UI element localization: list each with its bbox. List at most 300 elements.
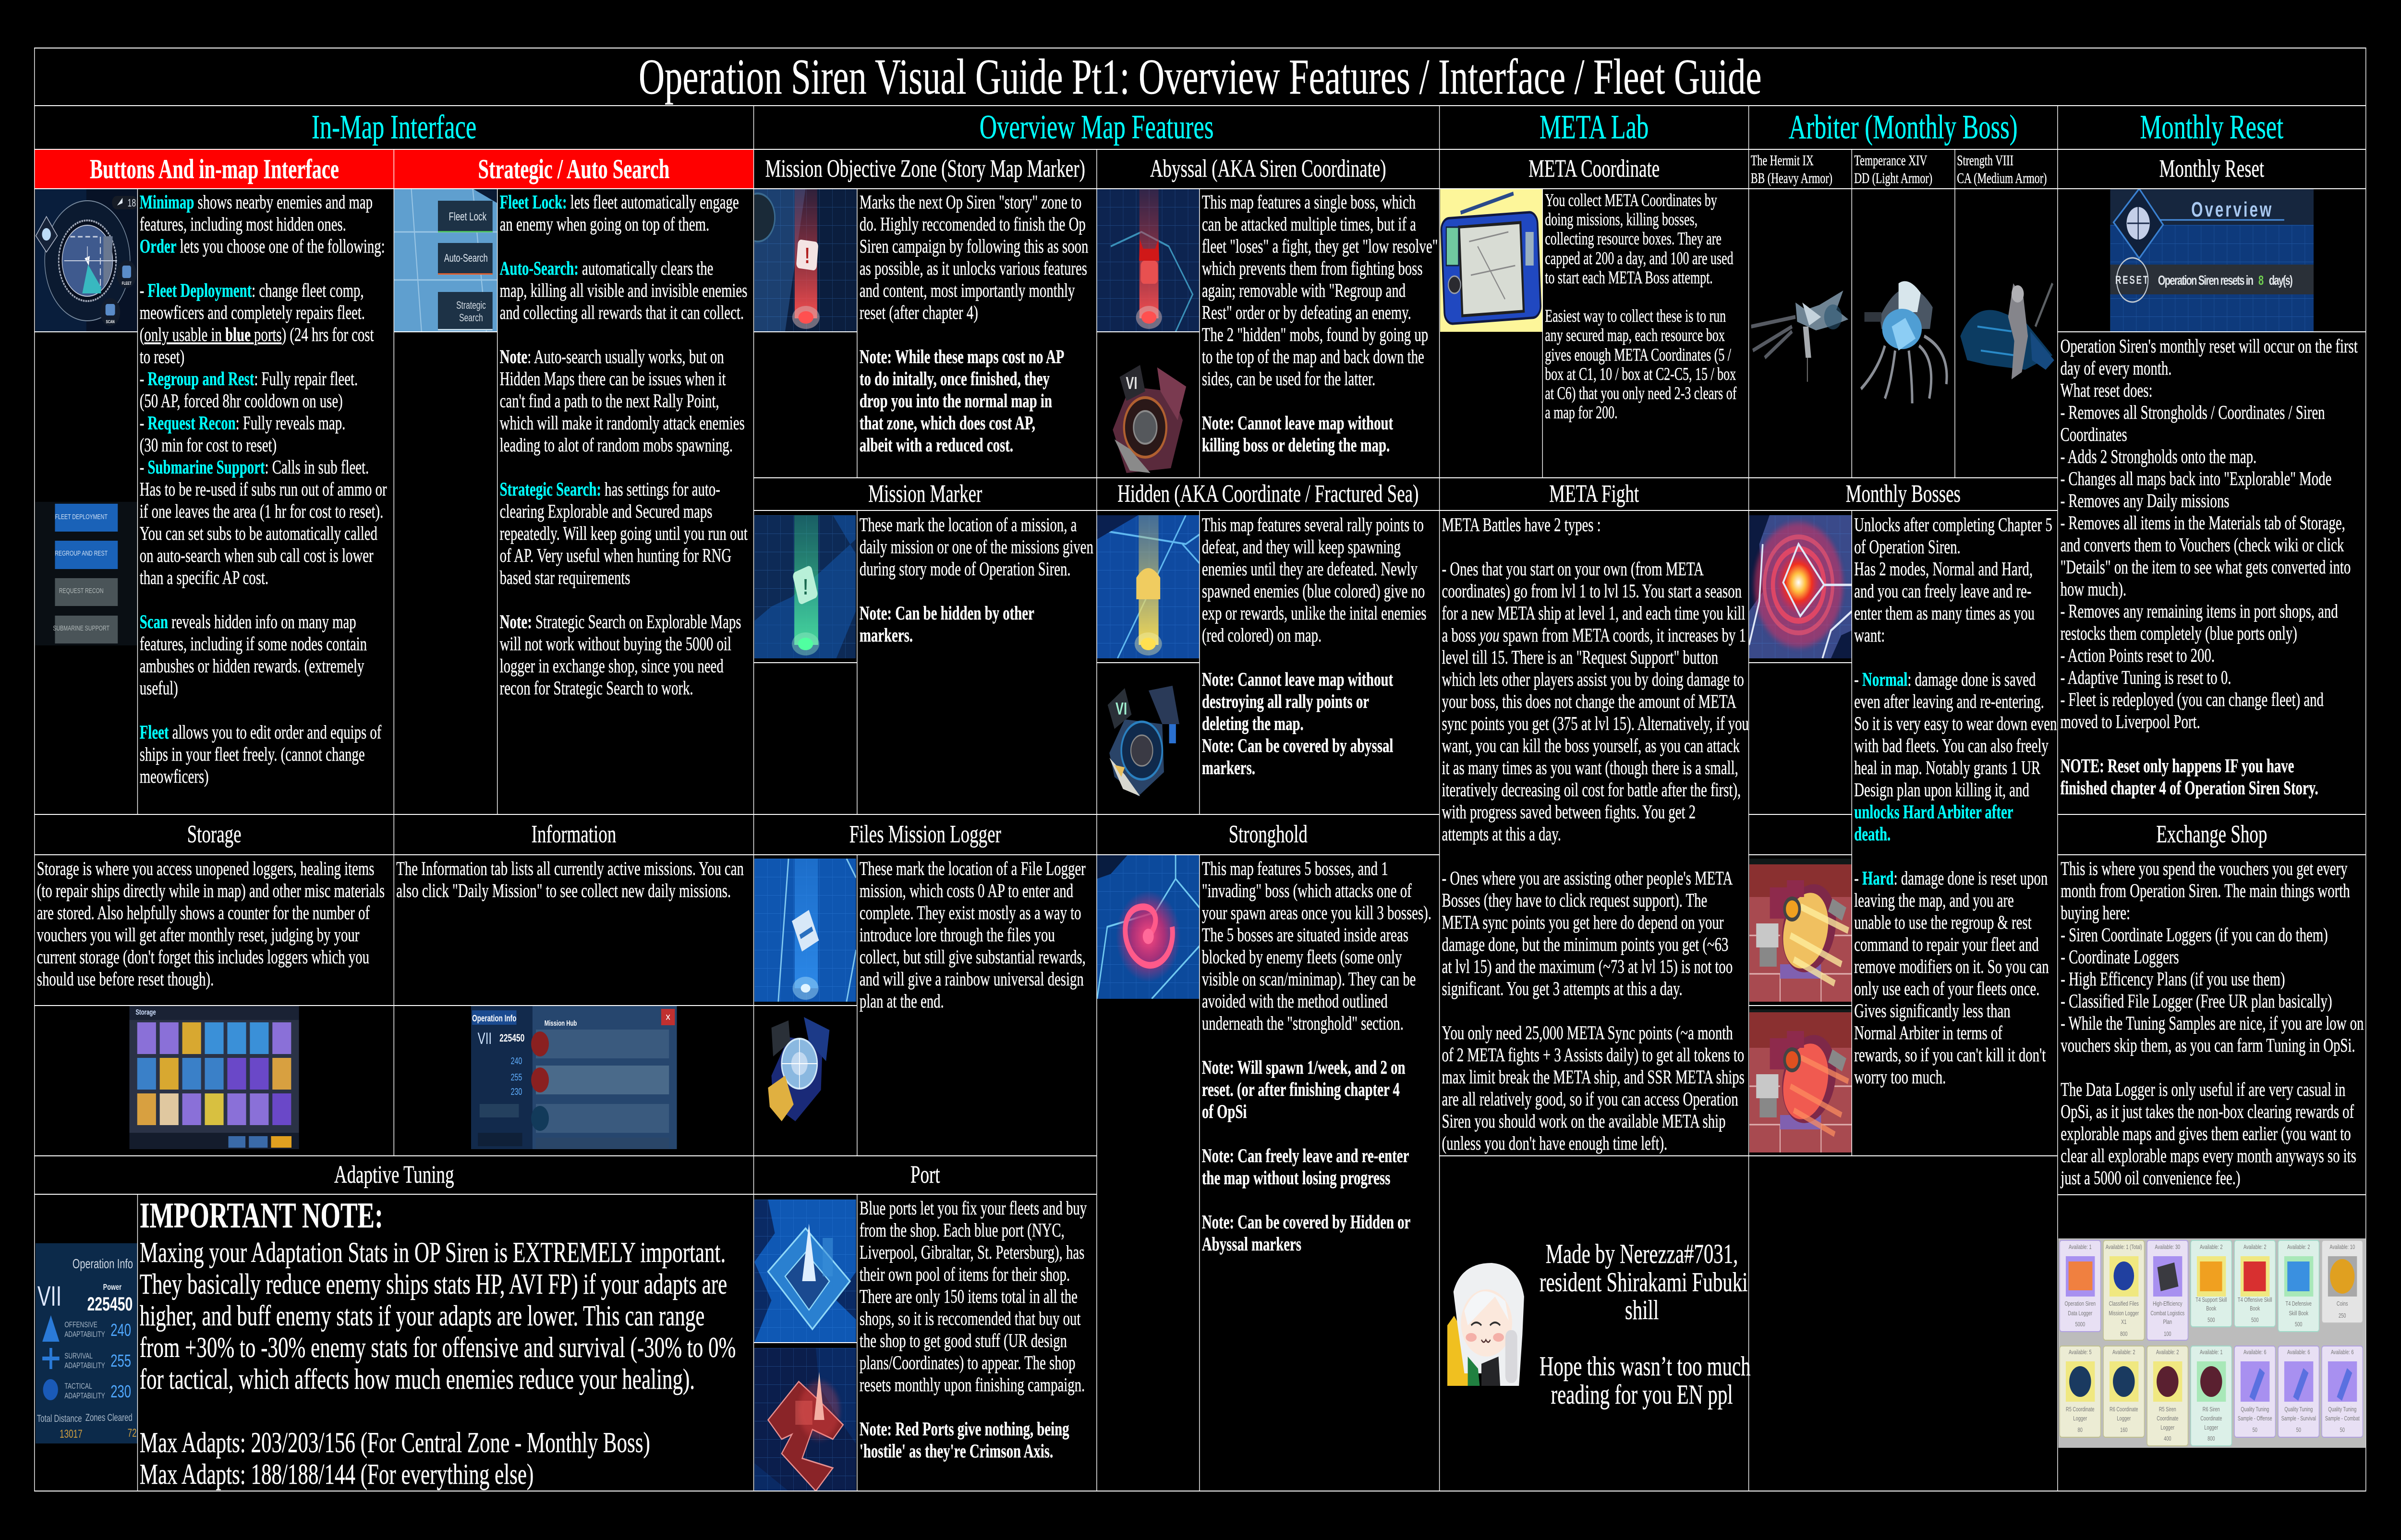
- text: Buttons and in-map interface: useful): [140, 677, 178, 699]
- image: exchange shop items: R5 Coordinate: [2066, 1407, 2095, 1413]
- image: exchange shop items: Available: 2: [2112, 1349, 2135, 1356]
- image: adaptive stats panel: VII: [37, 1280, 61, 1312]
- text: Monthly Reset: - Fleet is redeployed (you can change fleet) and: [2061, 689, 2324, 710]
- image: adaptive stats panel: 225450: [87, 1294, 133, 1315]
- text: Buttons and in-map interface: Order lets you choose one of the following:: [140, 235, 385, 257]
- text: Mission Marker: [860, 514, 1093, 646]
- section heading: Overview Map Features: Overview Map Features: [980, 109, 1213, 146]
- image: exchange shop items: Available: 6: [2243, 1349, 2267, 1356]
- text: META Fight: iteratively decreasing oil cost for battle after the first),: [1442, 779, 1741, 800]
- image: order buttons: REGROUP AND REST: [55, 549, 108, 557]
- text: Buttons and in-map interface: [140, 191, 387, 788]
- text: Buttons and in-map interface: on auto-search when sub call cost is lower: [140, 545, 374, 566]
- text: Abyssal: sides, can be used for the latter.: [1202, 368, 1375, 389]
- text: Monthly Reset: [2061, 335, 2358, 799]
- text: Strategic and auto search: Fleet Lock: lets fleet automatically engage: [500, 191, 739, 213]
- text: META Coordinate: any secured map, each resource box: [1545, 325, 1725, 345]
- text: Stronghold: This map features 5 bosses, and 1: [1202, 858, 1388, 879]
- text: META Fight: attempts at this a day.: [1442, 823, 1561, 845]
- heading: Information: Information: [532, 821, 616, 848]
- text: Mission Objective Zone: Siren campaign by following this as soon: [860, 235, 1088, 257]
- text: Strategic and auto search: of AP. Very useful when hunting for RNG: [500, 545, 731, 566]
- image: exchange shop items: Available: 2: [2243, 1244, 2267, 1250]
- image: exchange shop items: R6 Coordinate: [2110, 1407, 2138, 1413]
- icon: coordinate logger: [1104, 681, 1181, 799]
- text: Buttons and in-map interface: - Request Recon: Fully reveals map.: [140, 412, 345, 434]
- image: operation info screen: Mission Hub: [545, 1019, 577, 1027]
- text: META Fight: at lvl 15) and the maximum (~73 at lvl 15) is not too: [1442, 956, 1733, 977]
- text: Buttons and in-map interface: (only usable in blue ports) (24 hrs for cost: [140, 324, 374, 345]
- text: Monthly Bosses: heal in map. Notably grants 1 UR: [1854, 757, 2040, 778]
- text: Exchange Shop: clear all explorable maps every month anyways so its: [2061, 1145, 2356, 1166]
- image: overview reset banner: [2110, 189, 2314, 332]
- text: META Fight: sync points you get (375 at lvl 15). Alternatively, if you: [1442, 713, 1749, 734]
- image: exchange shop items: Coins: [2337, 1301, 2348, 1307]
- image: minimap: 18: [128, 198, 136, 209]
- note: Adaptive Tuning important note: They basically reduce enemy ships stats HP, AVI FP) if your adapts are: [140, 1268, 727, 1300]
- text: Abyssal: to the top of the map and back down the: [1202, 346, 1424, 367]
- image: exchange shop items: 100: [2164, 1331, 2171, 1337]
- text: META Coordinate: a map for 200.: [1545, 402, 1618, 422]
- text: Storage: should use before reset though).: [37, 968, 214, 990]
- section heading: Monthly Reset: Monthly Reset: [2140, 109, 2283, 146]
- text: META Coordinate: capped at 200 a day, and 100 are used: [1545, 248, 1734, 268]
- image: adaptive stats panel: [36, 1243, 137, 1443]
- image: exchange shop items: Logger: [2160, 1425, 2174, 1431]
- text: credit note: Made by Nerezza#7031,: [1546, 1239, 1738, 1269]
- image: order buttons: REQUEST RECON: [59, 586, 104, 594]
- heading: The Hermit IX: BB (Heavy Armor): [1751, 170, 1832, 186]
- heading: Hidden: Hidden (AKA Coordinate / Fractured Sea): [1117, 480, 1419, 508]
- image: adaptive stats panel: ADAPTABILITY: [64, 1330, 105, 1339]
- text: Exchange Shop: - While the Tuning Samples are nice, if you are low on: [2061, 1012, 2364, 1034]
- text: Exchange Shop: OpSi, as it just takes the non-box clearing rewards of: [2061, 1101, 2354, 1122]
- text: META Coordinate: You collect META Coordinates by: [1545, 190, 1717, 210]
- text: Stronghold: "invading" boss (which attacks one of: [1202, 880, 1412, 901]
- heading: Stronghold: Stronghold: [1229, 821, 1308, 848]
- image: adaptive stats panel: 230: [110, 1382, 131, 1401]
- text: Stronghold: the map without losing progress: [1202, 1167, 1390, 1188]
- image: exchange shop items: Classified Files: [2109, 1301, 2139, 1307]
- text: Exchange Shop: - Siren Coordinate Loggers (if you can do them): [2061, 924, 2328, 946]
- text: Exchange Shop: just a 5000 oil convenience fee.): [2061, 1167, 2240, 1188]
- text: credit note: reading for you EN ppl: [1551, 1379, 1733, 1410]
- heading: Monthly Reset: Monthly Reset: [2159, 155, 2264, 182]
- text: Abyssal: fleet "loses" a fight, they get "low resolve": [1202, 235, 1438, 257]
- image: order buttons: SUBMARINE SUPPORT: [53, 624, 109, 632]
- image: exchange shop items: Sample - Combat: [2325, 1416, 2360, 1422]
- text: Monthly Bosses: enter them as many times as you: [1854, 602, 2035, 624]
- text: Buttons and in-map interface: Fleet allows you to edit order and equips of: [140, 721, 381, 743]
- text: Exchange Shop: [2061, 858, 2364, 1189]
- text: Monthly Reset: "Details" on the item to see what gets converted into: [2061, 556, 2351, 578]
- image: stronghold swirl: [1097, 855, 1200, 999]
- image: exchange shop items: Quality Tuning: [2241, 1407, 2269, 1413]
- image: story map marker: [754, 189, 857, 332]
- text: Strategic and auto search: which will make it randomly attack enemies: [500, 412, 745, 434]
- image: adaptive stats panel: Power: [103, 1283, 121, 1292]
- text: Monthly Bosses: command to repair your fleet and: [1854, 934, 2039, 955]
- image: operation info screen: 225450: [499, 1033, 524, 1044]
- text: Port: their own pool of items for their shop.: [860, 1263, 1070, 1285]
- image: overview reset banner: Overview: [2191, 198, 2271, 221]
- text: Storage: Storage is where you access unopened loggers, healing items: [37, 858, 374, 879]
- image: exchange shop items: Available: 1: [2069, 1244, 2092, 1250]
- text: Hidden: destroying all rally points or: [1202, 691, 1369, 712]
- text: Port: from the shop. Each blue port (NYC,: [860, 1219, 1065, 1241]
- text: Stronghold: your spawn areas once you kill 3 bosses).: [1202, 902, 1431, 923]
- text: Port: Blue ports let you fix your fleets and buy: [860, 1197, 1087, 1219]
- text: Stronghold: Note: Can be covered by Hidden or: [1202, 1211, 1410, 1233]
- image: operation info screen: Operation Info: [472, 1014, 516, 1024]
- image: exchange shop items: Logger: [2204, 1425, 2218, 1431]
- text: Stronghold: The 5 bosses are situated inside areas: [1202, 924, 1408, 946]
- text: Buttons and in-map interface: - Fleet Deployment: change fleet comp,: [140, 279, 364, 301]
- text: META Fight: coordinates) go from lvl 1 to lvl 15. You start a season: [1442, 580, 1742, 602]
- text: Hidden: enemies until they are defeated. Newly: [1202, 558, 1418, 580]
- text: Buttons and in-map interface: (30 min for cost to reset): [140, 434, 277, 456]
- text: Monthly Reset: how much).: [2061, 578, 2126, 600]
- text: Hidden: markers.: [1202, 757, 1255, 778]
- image: exchange shop items: Available: 1 (Total): [2106, 1244, 2142, 1250]
- red heading: Strategic / Auto Search: [394, 150, 754, 189]
- text: Abyssal: again; removable with "Regroup and: [1202, 279, 1406, 301]
- text: Strategic and auto search: Auto-Search: automatically clears the: [500, 257, 713, 279]
- image: overview reset banner: RESET: [2115, 274, 2149, 287]
- text: Mission Objective Zone: albeit with a reduced cost.: [860, 434, 1013, 456]
- text: Strategic and auto search: map, killing all visible and invisible enemies: [500, 279, 747, 301]
- image: hidden map marker: [1097, 515, 1200, 658]
- text: Abyssal: which prevents them from fighting boss: [1202, 257, 1423, 279]
- text: Monthly Reset: - Changes all maps back into "Explorable" Mode: [2061, 468, 2331, 489]
- text: Stronghold: avoided with the method outlined: [1202, 990, 1388, 1012]
- text: META Fight: META sync points you get here do depend on your: [1442, 911, 1724, 933]
- image: adaptive stats panel: Operation Info: [73, 1257, 133, 1272]
- text: Abyssal: [1202, 191, 1438, 456]
- text: Monthly Bosses: - Hard: damage done is reset upon: [1854, 867, 2048, 889]
- text: Port: plans/Coordinates) to appear. The shop: [860, 1352, 1075, 1373]
- text: Mission Objective Zone: do. Highly reccomended to finish the Op: [860, 213, 1086, 235]
- image: Temperance boss: [1854, 264, 1954, 403]
- image: exchange shop items: 800: [2207, 1436, 2215, 1442]
- text: Exchange Shop: explorable maps and gives them earlier (you want to: [2061, 1123, 2351, 1144]
- text: Mission Objective Zone: Note: While these maps cost no AP: [860, 346, 1064, 367]
- image: operation info screen: ×: [666, 1010, 670, 1024]
- text: Strategic and auto search: Note: Auto-search usually works, but on: [500, 346, 724, 367]
- heading: Temperance XIV: [1854, 151, 1932, 187]
- note: Adaptive Tuning important note: higher, and buff enemy stats if your adapts are lower. This can range: [140, 1300, 704, 1332]
- text: Exchange Shop: The Data Logger is only useful if are very casual in: [2061, 1079, 2345, 1100]
- heading: Mission Objective Zone: Mission Objective Zone (Story Map Marker): [765, 155, 1085, 182]
- image: exchange shop items: 5000: [2075, 1322, 2085, 1328]
- image: exchange shop items: Mission Logger: [2109, 1310, 2139, 1317]
- title: Operation Siren Visual Guide Pt1: Overview Features / Interface / Fleet Guide: [639, 49, 1761, 105]
- text: Stronghold: Note: Will spawn 1/week, and 2 on: [1202, 1056, 1405, 1078]
- text: Storage: (to repair ships directly while in map) and other misc materials: [37, 880, 385, 901]
- text: Stronghold: underneath the "stronghold" section.: [1202, 1012, 1404, 1034]
- text: Monthly Bosses: want:: [1854, 624, 1885, 646]
- text: Abyssal: This map features a single boss, which: [1202, 191, 1416, 213]
- text: Buttons and in-map interface: meowficers): [140, 765, 209, 787]
- image: exchange shop items: Coordinate: [2200, 1416, 2222, 1422]
- text: Stronghold: Note: Can freely leave and re-enter: [1202, 1145, 1409, 1166]
- image: exchange shop items: R6 Siren: [2203, 1407, 2220, 1413]
- text: Port: There are only 150 items total in all the: [860, 1285, 1078, 1307]
- image: exchange shop items: Skill Book: [2289, 1310, 2308, 1317]
- image: adaptive stats panel: Total Distance: [37, 1413, 82, 1424]
- text: Monthly Bosses: worry too much.: [1854, 1066, 1946, 1088]
- text: META Fight: - Ones where you are assisting other people's META: [1442, 867, 1733, 889]
- text: credit note: resident Shirakami Fubuki: [1540, 1267, 1748, 1297]
- text: Monthly Bosses: Unlocks after completing Chapter 5: [1854, 514, 2052, 535]
- note: Adaptive Tuning important note: for tactical, which affects how much enemies reduce your healing).: [140, 1363, 695, 1395]
- text: Abyssal: killing boss or deleting the map.: [1202, 434, 1390, 456]
- image: minimap: [35, 189, 137, 332]
- text: Stronghold: blocked by enemy fleets (some only: [1202, 946, 1402, 968]
- text: Monthly Bosses: rewards, so if you can't kill it don't: [1854, 1044, 2046, 1066]
- text: Monthly Reset: - Removes any Daily missions: [2061, 490, 2229, 511]
- heading: Files Mission Logger: Files Mission Logger: [849, 821, 1001, 848]
- image: Normal arbiter ship: [1749, 859, 1852, 1002]
- text: Storage: vouchers you will get after monthly reset, judging by your: [37, 924, 359, 946]
- text: META Fight: are all relatively good, so if you can access Operation: [1442, 1088, 1738, 1110]
- image: exchange shop items: Quality Tuning: [2328, 1407, 2356, 1413]
- image: fleet lock and auto search buttons: Strategic: [456, 300, 486, 312]
- image: abyssal map marker: [1097, 189, 1200, 332]
- text: Stronghold: of OpSi: [1202, 1101, 1247, 1122]
- image: adaptive stats panel: 13017: [60, 1428, 83, 1441]
- image: exchange shop items: Logger: [2117, 1416, 2131, 1422]
- text: Exchange Shop: This is where you spend the vouchers you get every: [2061, 858, 2348, 879]
- image: Hard arbiter ship: [1749, 1009, 1852, 1152]
- heading: Monthly Bosses: Monthly Bosses: [1846, 480, 1961, 508]
- text: Exchange Shop: month from Operation Siren. The main things worth: [2061, 880, 2350, 901]
- text: META Fight: it as many times as you want (though there is a small,: [1442, 757, 1738, 778]
- text: credit note: Hope this wasn’t too much: [1540, 1351, 1751, 1382]
- note: Adaptive Tuning important note: Maxing your Adaptation Stats in OP Siren is EXTREMELY important.: [140, 1237, 726, 1269]
- text: Hidden: defeat, and they will keep spawning: [1202, 536, 1401, 558]
- text: Monthly Reset: - Adaptive Tuning is reset to 0.: [2061, 667, 2231, 688]
- text: Files Mission Logger: plan at the end.: [860, 990, 944, 1012]
- text: META Fight: your boss, this does not change the amount of META: [1442, 691, 1736, 712]
- heading: Strength VIII: [1957, 151, 2047, 187]
- text: Port: resets monthly upon finishing campaign.: [860, 1374, 1085, 1395]
- text: Monthly Bosses: unlocks Hard Arbiter after: [1854, 801, 2013, 823]
- image: order buttons: [35, 502, 137, 645]
- text: Monthly Bosses: death.: [1854, 823, 1891, 845]
- image: mission marker: !: [803, 575, 808, 599]
- text: Strategic and auto search: [500, 191, 748, 699]
- text: Strategic and auto search: clearing Explorable and Secured maps: [500, 500, 713, 522]
- text: Buttons and in-map interface: features, including most hidden ones.: [140, 213, 346, 235]
- text: credit note: [1540, 1240, 1744, 1409]
- text: META Fight: [1442, 514, 1749, 1154]
- red heading: Strategic / Auto Search: Strategic / Auto Search: [478, 154, 669, 184]
- text: Monthly Bosses: of Operation Siren.: [1854, 536, 1961, 558]
- section heading: Arbiter (Monthly Boss): Arbiter (Monthly Boss): [1789, 109, 2018, 146]
- text: Buttons and in-map interface: Scan reveals hidden info on many map: [140, 611, 356, 632]
- image: overview reset banner: 8: [2258, 273, 2264, 288]
- text: META Fight: Siren you should work on the available META ship: [1442, 1110, 1726, 1132]
- text: Monthly Reset: finished chapter 4 of Operation Siren Story.: [2061, 777, 2318, 799]
- note: Adaptive Tuning important note: IMPORTANT NOTE:: [140, 1196, 383, 1236]
- image: exchange shop items: 800: [2120, 1331, 2128, 1337]
- text: Monthly Reset: NOTE: Reset only happens IF you have: [2061, 755, 2294, 776]
- image: exchange shop items: 50: [2296, 1427, 2301, 1433]
- image: exchange shop items: Book: [2250, 1306, 2260, 1312]
- text: Hidden: Note: Can be covered by abyssal: [1202, 735, 1393, 756]
- text: Files Mission Logger: complete. They exist mostly as a way to: [860, 902, 1081, 923]
- text: Monthly Reset: Operation Siren's monthly reset will occur on the first: [2061, 335, 2358, 357]
- text: Monthly Bosses: Gives significantly less than: [1854, 1000, 2011, 1021]
- image: exchange shop items: Operation Siren: [2064, 1301, 2096, 1307]
- image: exchange shop items: Coordinate: [2157, 1416, 2178, 1422]
- image: exchange shop items: T4 Offensive Skill: [2238, 1297, 2272, 1303]
- image: exchange shop items: 400: [2164, 1436, 2171, 1442]
- text: Strategic and auto search: and collecting all rewards that it can collect.: [500, 302, 744, 323]
- text: Monthly Bosses: only use each of your fleets once.: [1854, 978, 2039, 999]
- text: Mission Marker: daily mission or one of the missions given: [860, 536, 1093, 558]
- image: exchange shop items: 160: [2120, 1427, 2128, 1433]
- text: Mission Marker: markers.: [860, 624, 913, 646]
- text: Monthly Bosses: even after leaving and re-entering.: [1854, 691, 2044, 712]
- text: Buttons and in-map interface: You can set subs to be automatically called: [140, 522, 377, 544]
- text: Abyssal: Note: Cannot leave map without: [1202, 412, 1393, 434]
- text: META Fight: Bosses (they have to click request support). The: [1442, 889, 1707, 911]
- image: fleet lock and auto search buttons: Auto-Search: [444, 252, 488, 265]
- image: adaptive stats panel: OFFENSIVE: [64, 1321, 97, 1330]
- image: exchange shop items: Available: 5: [2069, 1349, 2092, 1356]
- text: Mission Marker: Note: Can be hidden by other: [860, 602, 1034, 624]
- text: Strategic and auto search: repeatedly. Will keep going until you run out: [500, 522, 748, 544]
- image: META coordinate device: [1440, 189, 1542, 332]
- image: exchange shop items: Available: 1: [2200, 1349, 2223, 1356]
- text: Buttons and in-map interface: Has to be re-used if subs run out of ammo or: [140, 478, 387, 500]
- text: Hidden: deleting the map.: [1202, 713, 1304, 734]
- image: exchange shop items: 250: [2339, 1313, 2346, 1319]
- text: Information: The Information tab lists all currently active missions. You can: [396, 858, 744, 879]
- text: META Fight: damage done, but the minimum points you get (~63: [1442, 934, 1728, 955]
- text: Mission Objective Zone: reset (after chapter 4): [860, 302, 978, 323]
- image: exchange shop items: Available: 6: [2331, 1349, 2354, 1356]
- text: Buttons and in-map interface: Minimap shows nearby enemies and map: [140, 191, 373, 213]
- image: adaptive stats panel: Zones Cleared: [85, 1412, 133, 1423]
- icon: siren coordinate logger: [1109, 358, 1193, 475]
- text: Port: shops, so it is reccomended that buy out: [860, 1308, 1080, 1329]
- text: Mission Marker: during story mode of Operation Siren.: [860, 558, 1071, 580]
- image: exchange shop items: High-Efficiency: [2153, 1301, 2183, 1307]
- text: Exchange Shop: - High Efficency Plans (if you use them): [2061, 968, 2285, 990]
- image: exchange shop items: [2058, 1238, 2365, 1448]
- image: red port: [754, 1348, 856, 1491]
- text: META Coordinate: Easiest way to collect these is to run: [1545, 306, 1726, 326]
- heading: META Coordinate: META Coordinate: [1528, 155, 1660, 182]
- image: story map marker: !: [805, 244, 810, 268]
- image: fleet lock and auto search buttons: Fleet Lock: [449, 210, 487, 223]
- text: META Fight: max limit break the META ship, and SSR META ships: [1442, 1066, 1745, 1088]
- image: exchange shop items: 500: [2251, 1317, 2258, 1323]
- image: exchange shop items: 50: [2253, 1427, 2257, 1433]
- image: operation info screen: [471, 1006, 677, 1149]
- text: Monthly Bosses: unable to use the regroup & rest: [1854, 911, 2032, 933]
- image: minimap: SCAN: [106, 319, 115, 324]
- text: META Coordinate: collecting resource boxes. They are: [1545, 229, 1722, 248]
- text: Hidden: [1202, 514, 1427, 779]
- text: Stronghold: [1202, 858, 1431, 1255]
- text: Buttons and in-map interface: meowficers and completely repairs fleet.: [140, 302, 365, 323]
- text: Files Mission Logger: and will give a rainbow universal design: [860, 968, 1084, 990]
- heading: META Fight: META Fight: [1549, 480, 1639, 508]
- text: Stronghold: visible on scan/minimap). They can be: [1202, 968, 1416, 990]
- image: exchange shop items: Logger: [2073, 1416, 2087, 1422]
- text: Hidden: exp or rewards, unlike the inital enemies: [1202, 602, 1427, 624]
- text: Monthly Reset: - Removes any remaining items in port shops, and: [2061, 600, 2338, 622]
- text: META Fight: - Ones that you start on your own (from META: [1442, 558, 1704, 580]
- text: credit note: shill: [1625, 1295, 1659, 1325]
- text: Mission Objective Zone: drop you into the normal map in: [860, 390, 1052, 412]
- text: Strategic and auto search: logger in exchange shop, since you need: [500, 655, 724, 677]
- text: Monthly Reset: and converts them to Vouchers (check wiki or click: [2061, 534, 2344, 556]
- text: Files Mission Logger: These mark the location of a File Logger: [860, 858, 1086, 879]
- text: META Fight: (unless you don't have enough time left).: [1442, 1132, 1667, 1154]
- image: minimap: FLEET: [122, 281, 132, 286]
- text: META Fight: You only need 25,000 META Sync points (~a month: [1442, 1022, 1733, 1043]
- text: META Fight: for a new META ship at level 1, and each time you kill: [1442, 602, 1745, 624]
- text: Stronghold: reset. (or after finishing chapter 4: [1202, 1079, 1400, 1100]
- text: Monthly Reset: - Removes all Strongholds / Coordinates / Siren: [2061, 401, 2325, 423]
- note: Adaptive Tuning important note: [140, 1195, 736, 1491]
- image: mission marker: [754, 515, 856, 658]
- image: exchange shop items: T4 Defensive: [2286, 1301, 2312, 1307]
- heading: Mission Marker: Mission Marker: [868, 480, 982, 508]
- text: Hidden: This map features several rally points to: [1202, 514, 1424, 535]
- image: files logger marker: [754, 859, 856, 1002]
- image: Strength boss: [1957, 274, 2057, 389]
- text: META Fight: META Battles have 2 types :: [1442, 514, 1601, 535]
- heading: The Hermit IX: The Hermit IX: [1751, 152, 1814, 169]
- image: storage screen: Storage: [135, 1007, 156, 1016]
- text: Strategic and auto search: Strategic Search: has settings for auto-: [500, 478, 720, 500]
- text: META Fight: significant. You get 3 attempts at this a day.: [1442, 978, 1683, 999]
- image: exchange shop items: 500: [2295, 1322, 2302, 1328]
- text: Abyssal: The 2 "hidden" mobs, found by going up: [1202, 324, 1428, 345]
- text: Buttons and in-map interface: ambushes or hidden rewards. (extremely: [140, 655, 364, 677]
- text: Monthly Bosses: - Normal: damage done is saved: [1854, 668, 2036, 690]
- text: META Coordinate: doing missions, killing bosses,: [1545, 209, 1698, 229]
- image: adaptive stats panel: ADAPTABILITY: [64, 1361, 105, 1370]
- image: exchange shop items: Available: 2: [2156, 1349, 2179, 1356]
- text: Files Mission Logger: [860, 858, 1086, 1012]
- image: order buttons: FLEET DEPLOYMENT: [55, 512, 108, 521]
- text: Monthly Reset: moved to Liverpool Port.: [2061, 711, 2200, 732]
- text: META Fight: with progress saved between fights. You get 2: [1442, 801, 1696, 823]
- text: Monthly Bosses: Has 2 modes, Normal and Hard,: [1854, 558, 2033, 580]
- text: Port: Liverpool, Gibraltar, St. Petersburg), has: [860, 1241, 1084, 1263]
- text: Hidden: spawned enemies (blue colored) give no: [1202, 580, 1425, 602]
- image: exchange shop items: Available: 6: [2287, 1349, 2310, 1356]
- text: META Coordinate: box at C1, 10 / box at C2-C5, 15 / box: [1545, 364, 1736, 384]
- text: Monthly Bosses: [1854, 514, 2057, 1088]
- text: Mission Objective Zone: Marks the next Op Siren "story" zone to: [860, 191, 1081, 213]
- text: Strategic and auto search: recon for Strategic Search to work.: [500, 677, 693, 699]
- icon: files mission logger: [764, 1013, 837, 1124]
- text: Mission Objective Zone: to do initally, once finished, they: [860, 368, 1050, 389]
- image: exchange shop items: Sample - Offense: [2238, 1416, 2272, 1422]
- image: exchange shop items: R5 Siren: [2159, 1407, 2176, 1413]
- text: Monthly Reset: day of every month.: [2061, 357, 2171, 379]
- image: exchange shop items: Available: 10: [2329, 1244, 2355, 1250]
- text: Buttons and in-map interface: than a specific AP cost.: [140, 567, 268, 588]
